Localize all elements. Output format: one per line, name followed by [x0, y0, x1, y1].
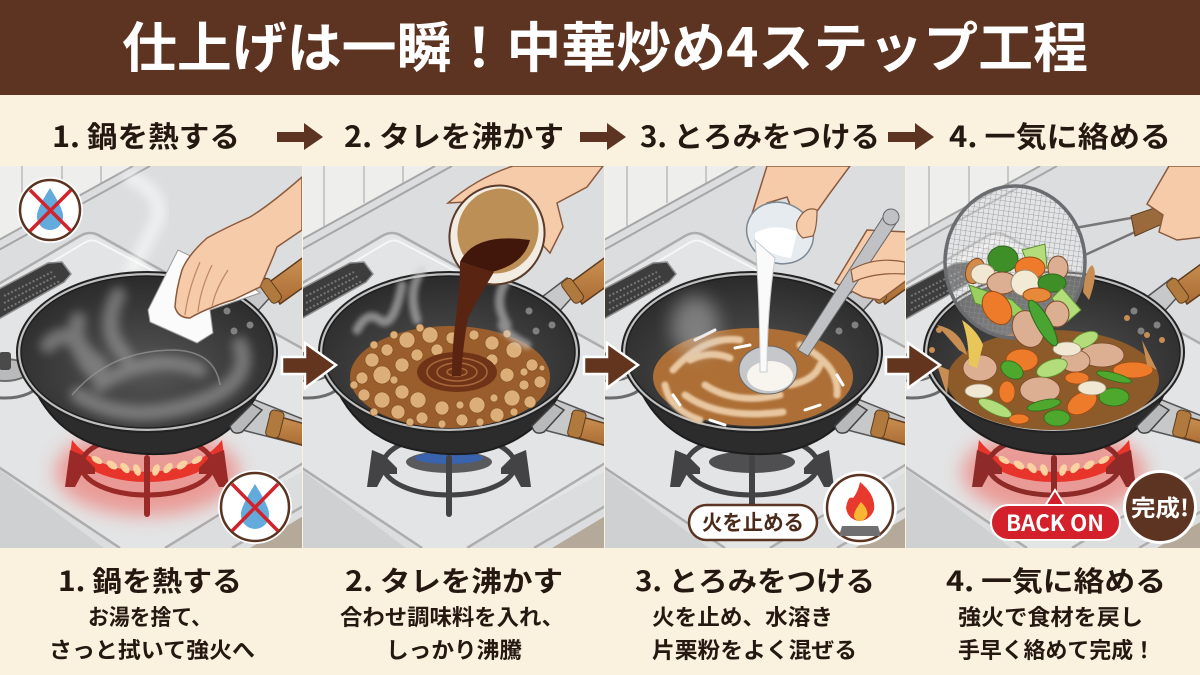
ladle — [739, 209, 899, 394]
red hot burner — [55, 428, 239, 516]
caption: step 1: お湯を捨て、 — [88, 600, 212, 632]
food falling from strainer — [962, 244, 1081, 368]
boiling sauce — [350, 324, 550, 428]
caption: step 4 — [946, 560, 1166, 665]
caption: step 2: 合わせ調味料を入れ、 — [340, 600, 564, 632]
badge: complete: 完成! — [1131, 489, 1189, 523]
panel: step 4 toss and finish — [880, 166, 1200, 548]
callout: stop heat: 火を止める — [702, 507, 804, 537]
thumb — [797, 209, 817, 238]
white steam above wok — [125, 175, 159, 275]
caption: step 3: 3. とろみをつける — [635, 560, 875, 600]
left hand — [751, 166, 851, 214]
hand with cloth — [175, 177, 302, 318]
sauce bowl — [448, 184, 546, 286]
sauce splashes — [929, 265, 1165, 395]
burner off — [367, 435, 531, 514]
flow arrow 3 — [886, 343, 940, 388]
title banner: 仕上げは一瞬！中華炒め4ステップ工程 — [122, 4, 1088, 83]
caption: step 4: 手早く絡めて完成！ — [958, 633, 1155, 665]
caption: step 1: 1. 鍋を熱する — [58, 560, 242, 600]
strainer — [945, 186, 1167, 338]
caption: step 2: しっかり沸騰 — [386, 633, 522, 665]
cloth — [148, 250, 260, 343]
step header: 2: 2. タレを沸かす — [344, 114, 564, 156]
sauce stream — [452, 262, 494, 376]
step header: 3: 3. とろみをつける — [640, 114, 880, 156]
steam — [671, 295, 719, 355]
step header: 1: 1. 鍋を熱する — [52, 114, 240, 156]
panel: step 1 heat the wok — [0, 166, 309, 548]
steam in wok — [48, 295, 243, 413]
food in wok — [947, 328, 1159, 430]
callout: back on: BACK ON — [1006, 506, 1104, 538]
icon: no water bottom-right — [218, 470, 292, 544]
steam — [357, 270, 527, 345]
flow arrow 2 — [584, 343, 638, 388]
caption: step 4: 強火で食材を戻し — [958, 600, 1143, 632]
caption: step 3: 火を止め、水溶き — [652, 600, 833, 632]
header arrow 1 — [277, 123, 323, 150]
sauce swirl — [653, 328, 853, 426]
step header: 4: 4. 一気に絡める — [949, 114, 1171, 156]
title banner — [0, 0, 1200, 95]
header arrow 2 — [580, 123, 626, 150]
panel: step 2 boil the sauce — [303, 166, 604, 548]
red hot burner — [962, 428, 1146, 516]
callout: back on — [991, 490, 1120, 540]
caption: step 3 — [635, 560, 875, 665]
hand holding bowl — [448, 166, 603, 253]
flow arrow 1 — [282, 343, 336, 388]
burner off — [670, 445, 834, 504]
fingers over ladle — [851, 260, 905, 282]
icon: flame on burner — [823, 471, 897, 545]
panel: step 3 thicken — [605, 166, 905, 548]
caption: step 3: 片栗粉をよく混ぜる — [652, 633, 857, 665]
caption: step 2: 2. タレを沸かす — [345, 560, 563, 600]
badge: complete — [1123, 470, 1197, 544]
icon: no water top-left — [17, 177, 83, 243]
caption: step 1: さっと拭いて強火へ — [49, 633, 255, 665]
caption: step 4: 4. 一気に絡める — [946, 560, 1166, 600]
milk cup and stream — [746, 201, 814, 372]
header arrow 3 — [888, 123, 934, 150]
hand with strainer — [1147, 166, 1200, 240]
right hand holding ladle — [835, 230, 907, 300]
caption: step 2 — [340, 560, 564, 665]
caption: step 1 — [49, 560, 255, 665]
